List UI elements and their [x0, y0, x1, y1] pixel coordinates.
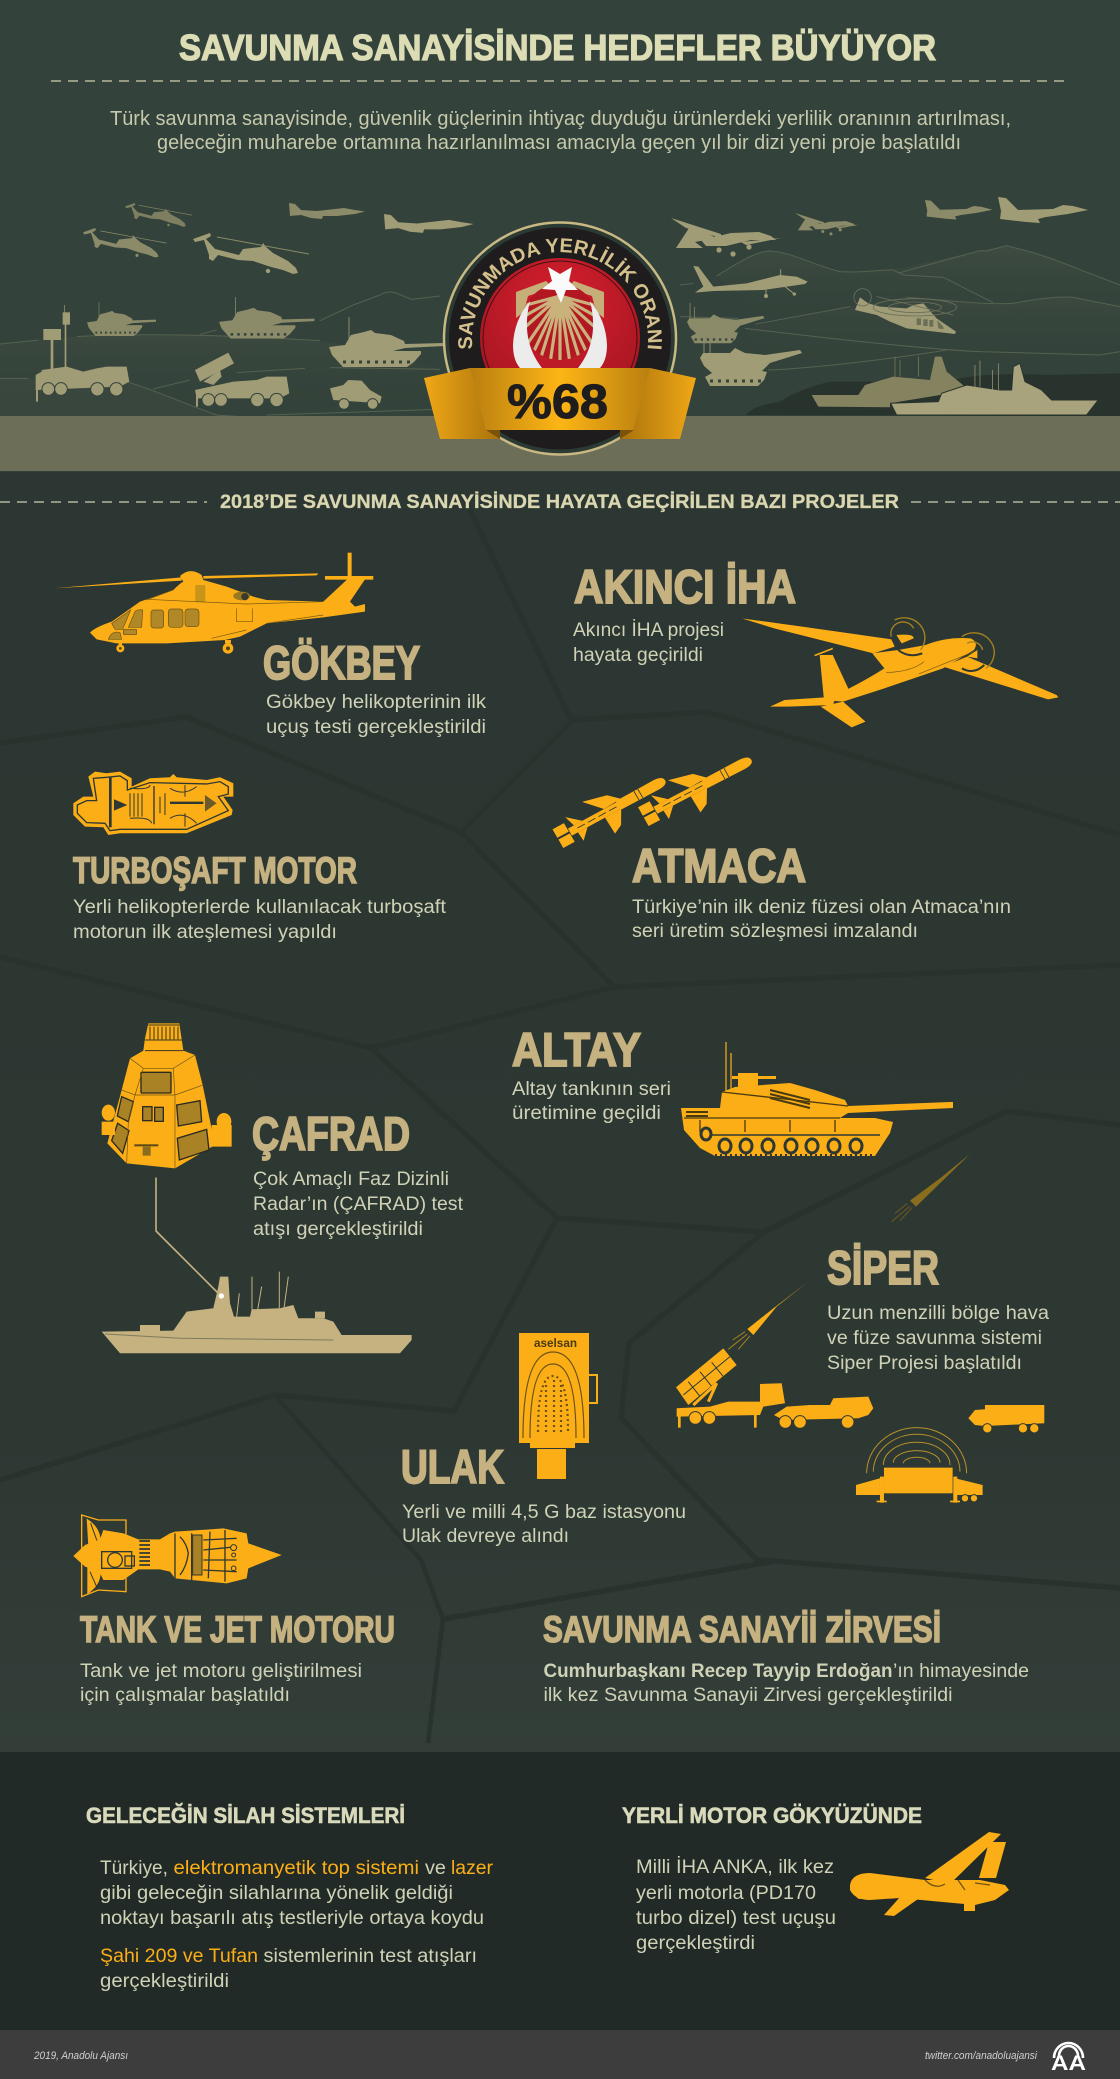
aircraft right — [671, 197, 1088, 334]
hills and ridge lines left — [0, 292, 440, 417]
icon: AA logo: AA — [1051, 2052, 1086, 2075]
title: SAVUNMA SANAYİSİNDE HEDEFLER BÜYÜYOR — [179, 27, 936, 68]
emblem: star and crescent — [513, 267, 607, 368]
aircraft left — [83, 203, 474, 274]
icon: ship — [102, 1272, 412, 1353]
crack lines — [0, 510, 1120, 1743]
text: future weapons: noktayı başarılı atış testleriyle ortaya koydu — [100, 1908, 484, 1929]
heading: Yerli motor gökyüzünde: YERLİ MOTOR GÖKYÜZÜNDE — [622, 1803, 922, 1828]
text: future weapons: ve — [425, 1858, 446, 1879]
heading: ALTAY — [512, 1023, 641, 1076]
description — [632, 897, 1011, 942]
description: Yerli ve milli 4,5 G baz istasyonu — [402, 1502, 686, 1523]
icon: Ulak base station: aselsan — [534, 1336, 577, 1350]
heading: ÇAFRAD — [252, 1107, 410, 1160]
description: Siper Projesi başlatıldı — [827, 1353, 1022, 1374]
ground vehicles left — [36, 297, 444, 409]
description: Cumhurbaşkanı Recep Tayyip Erdoğan — [544, 1661, 892, 1682]
footer — [0, 2030, 1120, 2079]
howitzers — [687, 303, 802, 386]
description: Türkiye’nin ilk deniz füzesi olan Atmaca’nın — [632, 897, 1011, 918]
panel: Gökbey — [53, 553, 487, 738]
icon: ÇAFRAD radar — [102, 1023, 232, 1168]
curved label: SAVUNMADA YERLİLİK ORANI — [458, 238, 662, 350]
panel: Ulak — [401, 1333, 686, 1547]
description — [573, 620, 724, 666]
description: seri üretim sözleşmesi imzalandı — [632, 921, 918, 942]
description: ’ın himayesinde — [893, 1661, 1029, 1682]
intro text: geleceğin muharebe ortamına hazırlanılması amacıyla geçen yıl bir dizi yeni proje başlatıldı — [157, 132, 961, 154]
heading: ULAK — [401, 1440, 504, 1493]
heading: SAVUNMA SANAYİİ ZİRVESİ — [543, 1609, 941, 1650]
panel: Atmaca — [547, 742, 1011, 942]
ground band — [0, 416, 1120, 471]
description: ve füze savunma sistemi — [827, 1328, 1042, 1349]
text: Anka: yerli motorla (PD170 — [636, 1883, 816, 1904]
panel: Savunma Sanayii Zirvesi — [543, 1609, 1029, 1706]
description — [73, 897, 447, 943]
description: üretimine geçildi — [512, 1103, 661, 1124]
description: Ulak devreye alındı — [402, 1526, 569, 1547]
panel: Akıncı İHA — [573, 560, 1058, 727]
icon: jet engine — [73, 1515, 282, 1597]
text: Anka — [636, 1857, 836, 1954]
percentage: %68 — [507, 376, 608, 429]
description: motorun ilk ateşlemesi yapıldı — [73, 922, 337, 943]
text: Anka: gerçekleştirdi — [636, 1933, 755, 1954]
ships — [812, 357, 1098, 415]
text: Anka: Milli İHA ANKA, ilk kez — [636, 1857, 834, 1878]
background: header — [0, 0, 1120, 472]
twitter handle: twitter.com/anadoluajansi — [925, 2050, 1037, 2062]
heading: AKINCI İHA — [574, 560, 796, 613]
description — [253, 1169, 464, 1240]
text: future weapons: lazer — [451, 1858, 494, 1879]
icon: Akıncı drone — [743, 618, 1058, 727]
heading: Geleceğin silah sistemleri: GELECEĞİN SİLAH SİSTEMLERİ — [86, 1803, 405, 1828]
description: hayata geçirildi — [573, 645, 703, 666]
icon: turboşaft engine — [73, 772, 233, 835]
description — [512, 1079, 671, 1124]
heading: ATMACA — [632, 839, 806, 892]
background: projects — [0, 472, 1120, 1752]
description — [544, 1661, 1029, 1706]
description — [80, 1661, 362, 1706]
description: Gökbey helikopterinin ilk — [266, 692, 487, 713]
intro text — [110, 108, 1011, 154]
description — [827, 1303, 1049, 1374]
icon: Atmaca missiles — [547, 742, 763, 858]
description — [402, 1502, 686, 1547]
seal circle — [444, 222, 676, 454]
icon: Anka drone — [850, 1832, 1009, 1916]
text: future weapons: sistemlerinin test atışları — [264, 1946, 477, 1967]
panel: Altay — [512, 1023, 953, 1156]
intro text: Türk savunma sanayisinde, güvenlik güçlerinin ihtiyaç duyduğu ürünlerdeki yerlilik oranının artırılması, — [110, 108, 1011, 130]
ribbon — [424, 368, 696, 439]
heading: GÖKBEY — [263, 636, 420, 689]
hills and ridge lines right — [680, 246, 1120, 416]
text: future weapons: gerçekleştirildi — [100, 1971, 229, 1992]
icon: Siper launcher, radar and trucks — [676, 1154, 1044, 1503]
text: future weapons: Türkiye, — [100, 1858, 168, 1879]
text: future weapons: elektromanyetik top sistemi — [174, 1858, 419, 1879]
description: Radar’ın (ÇAFRAD) test — [253, 1194, 464, 1215]
description: Uzun menzilli bölge hava — [827, 1303, 1049, 1324]
badge: savunmada yerlilik oranı — [424, 221, 696, 456]
section heading: 2018’DE SAVUNMA SANAYİSİNDE HAYATA GEÇİRİLEN BAZI PROJELER — [220, 492, 899, 513]
text: future weapons: gibi geleceğin silahlarına yönelik geldiği — [100, 1883, 453, 1904]
description: Yerli helikopterlerde kullanılacak turboşaft — [73, 897, 447, 918]
icon: Ulak base station — [519, 1333, 597, 1479]
description: atışı gerçekleştirildi — [253, 1219, 423, 1240]
description: ilk kez Savunma Sanayii Zirvesi gerçekleştirildi — [544, 1685, 952, 1706]
panel: Çafrad — [102, 1023, 464, 1353]
description: Altay tankının seri — [512, 1079, 671, 1100]
description: için çalışmalar başlatıldı — [80, 1685, 290, 1706]
text: Anka: turbo dizel) test uçuşu — [636, 1908, 836, 1929]
heading: SİPER — [827, 1241, 939, 1294]
text: future weapons — [100, 1858, 494, 1992]
pointer line — [156, 1178, 221, 1296]
panel: Turboşaft motor — [73, 772, 447, 943]
description: Tank ve jet motoru geliştirilmesi — [80, 1661, 362, 1682]
description: Akıncı İHA projesi — [573, 620, 724, 641]
icon: Gökbey helicopter — [53, 553, 373, 654]
panel: Tank ve jet motoru — [73, 1515, 395, 1706]
credit: 2019, Anadolu Ajansı — [33, 2050, 128, 2062]
panel: Siper — [676, 1154, 1049, 1503]
text: future weapons: Şahi 209 ve Tufan — [100, 1946, 258, 1967]
panel: hero scene with vehicles — [0, 197, 1120, 471]
icon: Altay tank — [681, 1042, 953, 1156]
panel: bottom section — [0, 1752, 1120, 2030]
description: Çok Amaçlı Faz Dizinli — [253, 1169, 449, 1190]
description — [266, 692, 487, 738]
heading: TURBOŞAFT MOTOR — [73, 850, 357, 891]
heading: TANK VE JET MOTORU — [80, 1609, 395, 1650]
description: uçuş testi gerçekleştirildi — [266, 717, 486, 738]
icon: AA logo — [1051, 2043, 1086, 2075]
